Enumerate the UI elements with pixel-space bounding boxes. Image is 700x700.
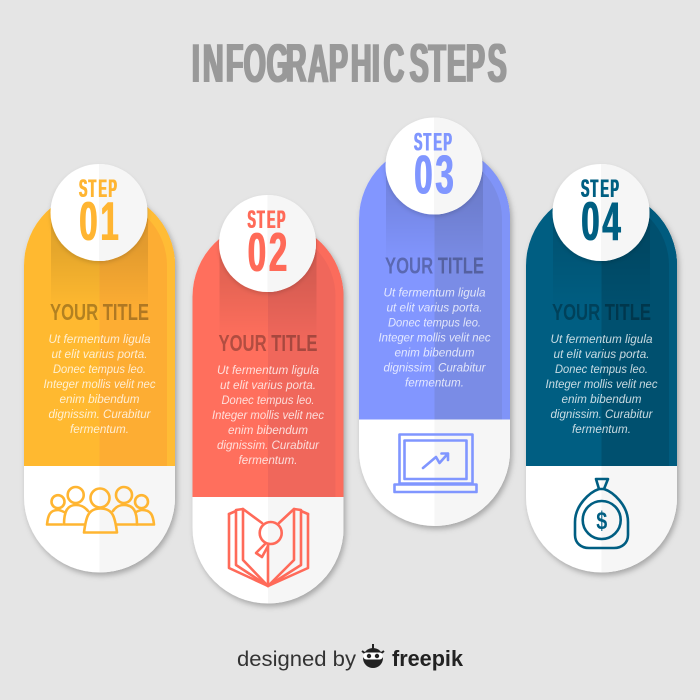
body text 04: dignissim. Curabitur <box>550 409 654 421</box>
body text 01: Donec tempus leo. <box>53 364 146 376</box>
panel: step 02: 02 <box>248 221 287 283</box>
body text 01: enim bibendum <box>60 394 140 406</box>
body text 01: ut elit varius porta. <box>52 349 148 361</box>
panel: step 03: 03 <box>414 144 454 206</box>
icon: laptop with chart arrow <box>394 434 476 492</box>
panel: step 01: YOUR TITLE <box>50 299 149 325</box>
body text 04: Ut fermentum ligula <box>550 334 652 346</box>
panel: step 04: STEP <box>581 175 619 203</box>
panel: step 02: STEP <box>248 206 285 234</box>
body text 03: dignissim. Curabitur <box>384 362 487 374</box>
panel: step 04 <box>526 164 677 573</box>
panel: step 01: 01 <box>79 190 119 252</box>
body text 04: ut elit varius porta. <box>554 349 650 361</box>
panel: step 03: YOUR TITLE <box>385 252 484 278</box>
panel: step 04: 04 <box>581 190 621 252</box>
body text 03: ut elit varius porta. <box>386 302 482 314</box>
icon: freepik mascot <box>362 644 384 668</box>
body text 03 <box>378 288 491 390</box>
panel: step 03: STEP <box>414 129 452 157</box>
icon: book with magnifier <box>229 509 308 586</box>
panel: step 02 <box>192 195 344 604</box>
body text 01 <box>44 334 156 436</box>
icon: money bag: $ <box>596 507 607 535</box>
body text 02 <box>212 365 324 467</box>
body text 02: Integer mollis velit nec <box>212 410 324 422</box>
title: INFOGRAPHIC STEPS <box>192 33 507 95</box>
body text 01: Ut fermentum ligula <box>48 334 150 346</box>
body text 01: Integer mollis velit nec <box>44 379 156 391</box>
body text 01: dignissim. Curabitur <box>48 409 152 421</box>
body text 03: enim bibendum <box>394 348 475 360</box>
body text 02: fermentum. <box>238 455 298 467</box>
credit: designed by freepik <box>237 644 464 671</box>
panel: step 02: YOUR TITLE <box>218 330 318 356</box>
body text 03: fermentum. <box>405 378 464 390</box>
panel: step 01 <box>24 164 175 573</box>
body text 02: enim bibendum <box>228 425 308 437</box>
body text 01: fermentum. <box>70 424 129 436</box>
body text 04: Donec tempus leo. <box>555 364 648 376</box>
panel: step 01: STEP <box>79 175 117 203</box>
body text 04 <box>546 334 658 436</box>
body text 04: fermentum. <box>572 424 631 436</box>
body text 02: Donec tempus leo. <box>222 395 314 407</box>
body text 02: dignissim. Curabitur <box>217 440 320 452</box>
credit: designed by freepik: designed by <box>237 648 357 671</box>
body text 04: enim bibendum <box>562 394 642 406</box>
body text 02: ut elit varius porta. <box>220 380 316 392</box>
credit: designed by freepik: freepik <box>392 646 464 671</box>
body text 04: Integer mollis velit nec <box>546 379 658 391</box>
body text 03: Integer mollis velit nec <box>378 332 491 344</box>
panel: step 04: YOUR TITLE <box>552 299 651 325</box>
body text 03: Donec tempus leo. <box>388 318 481 330</box>
icon: people <box>47 487 154 532</box>
icon: money bag <box>575 479 628 548</box>
panel: step 03 <box>359 118 510 526</box>
body text 02: Ut fermentum ligula <box>217 365 319 377</box>
body text 03: Ut fermentum ligula <box>384 288 486 300</box>
